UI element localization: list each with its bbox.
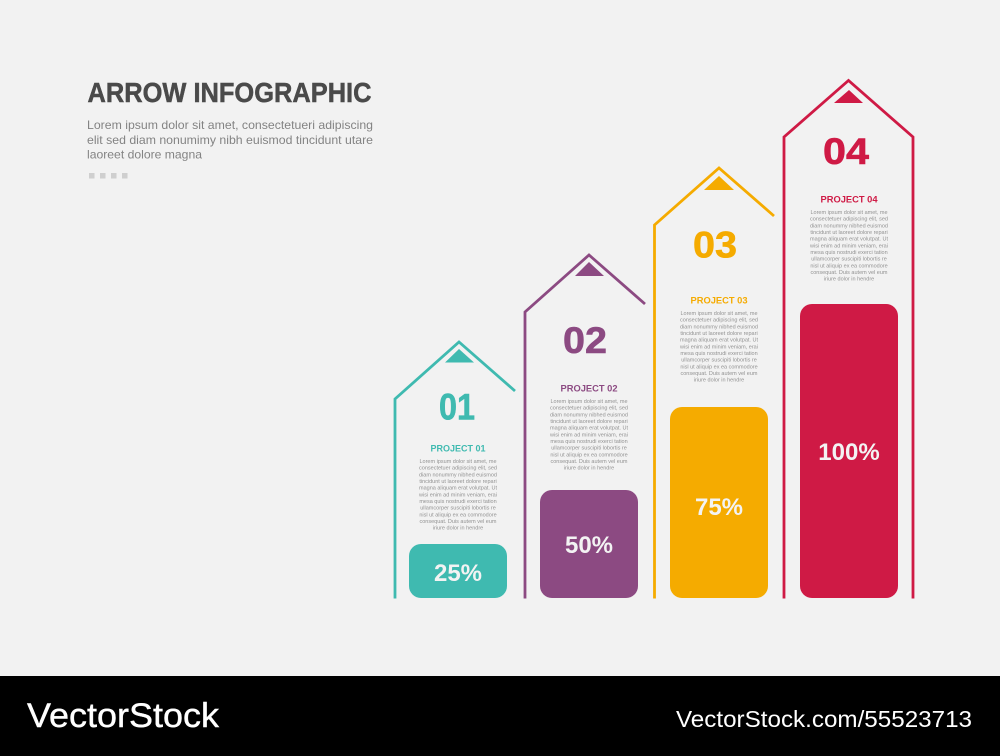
description 01: consectetuer adipiscing elit, sed	[419, 466, 497, 472]
arrow outline 01	[395, 342, 515, 598]
footer url: VectorStock.com/55523713	[676, 706, 972, 732]
description 03	[679, 311, 758, 384]
intro text: laoreet dolore magna	[87, 148, 202, 162]
description 03: nisl ut aliquip ex ea commodore	[680, 364, 758, 370]
description 03: ullamcorper suscipiti lobortis re	[681, 358, 757, 364]
description 01: Lorem ipsum dolor sit amet, me	[419, 459, 497, 465]
description 02: nisl ut aliquip ex ea commodore	[550, 452, 628, 458]
description 04: iriure dolor in hendre	[824, 277, 874, 283]
arrow tip 04	[834, 90, 863, 103]
project label 03: PROJECT 03	[690, 294, 748, 306]
description 04: nisl ut aliquip ex ea commodore	[810, 263, 888, 269]
description 03: magna aliquam erat volutpat. Ut	[680, 338, 758, 344]
bar 75%	[670, 407, 768, 598]
description 02: diam nonummy nibhed euismod	[550, 412, 628, 418]
footer brand: VectorStock	[27, 697, 220, 735]
description 01: wisi enim ad minim veniam, erai	[418, 492, 497, 498]
description 04: mesa quis nostrudi exerci tation	[810, 250, 888, 256]
bar 25%	[409, 544, 507, 598]
arrow column 04	[784, 80, 913, 598]
number 03: 03	[693, 224, 737, 266]
decorative square dots	[89, 173, 128, 178]
description 01: consequat. Duis autem vel eum	[419, 519, 497, 525]
description 03: consectetuer adipiscing elit, sed	[680, 318, 758, 324]
description 02: mesa quis nostrudi exerci tation	[550, 439, 628, 445]
description 01: diam nonummy nibhed euismod	[419, 472, 497, 478]
description 03: wisi enim ad minim veniam, erai	[679, 344, 758, 350]
description 02: ullamcorper suscipiti lobortis re	[551, 446, 627, 452]
arrow column 03	[654, 168, 774, 598]
description 02: consectetuer adipiscing elit, sed	[550, 406, 628, 412]
arrow outline 04	[784, 80, 913, 598]
description 01: nisl ut aliquip ex ea commodore	[419, 512, 497, 518]
project label 04: PROJECT 04	[820, 194, 878, 204]
description 01: tincidunt ut laoreet dolore repari	[419, 479, 497, 485]
number 02: 02	[563, 320, 607, 361]
description 02: consequat. Duis autem vel eum	[550, 459, 628, 465]
arrow outline 03	[654, 168, 774, 598]
description 04: ullamcorper suscipiti lobortis re	[811, 257, 887, 263]
description 02: wisi enim ad minim veniam, erai	[549, 432, 628, 438]
description 04	[809, 210, 888, 283]
description 01: magna aliquam erat volutpat. Ut	[419, 486, 497, 492]
bar 100%	[800, 304, 898, 598]
description 03: consequat. Duis autem vel eum	[680, 371, 758, 377]
description 04: consectetuer adipiscing elit, sed	[810, 217, 888, 223]
value 25%: 25%	[434, 560, 482, 587]
intro text: Lorem ipsum dolor sit amet, consectetueri adipiscing	[87, 118, 373, 132]
description 01: mesa quis nostrudi exerci tation	[419, 499, 497, 505]
arrow tip 02	[575, 262, 604, 276]
description 02: tincidunt ut laoreet dolore repari	[550, 419, 628, 425]
description 04: Lorem ipsum dolor sit amet, me	[810, 210, 888, 216]
description 03: mesa quis nostrudi exerci tation	[680, 351, 758, 357]
arrow column 02	[525, 255, 645, 598]
description 02: iriure dolor in hendre	[564, 466, 614, 472]
description 04: tincidunt ut laoreet dolore repari	[810, 230, 888, 236]
description 03: diam nonummy nibhed euismod	[680, 324, 758, 330]
description 04: wisi enim ad minim veniam, erai	[809, 243, 888, 249]
value 100%: 100%	[818, 439, 880, 466]
description 01	[418, 459, 497, 532]
value 75%: 75%	[695, 494, 743, 521]
arrow tip 03	[704, 176, 734, 190]
description 01: ullamcorper suscipiti lobortis re	[420, 506, 496, 512]
description 04: diam nonummy nibhed euismod	[810, 223, 888, 229]
description 01: iriure dolor in hendre	[433, 526, 483, 532]
description 02: Lorem ipsum dolor sit amet, me	[550, 399, 628, 405]
intro text: elit sed diam nonumimy nibh euismod tincidunt utare	[87, 133, 373, 147]
description 02: magna aliquam erat volutpat. Ut	[550, 426, 628, 432]
project label 01: PROJECT 01	[430, 442, 486, 454]
value 50%: 50%	[565, 532, 613, 559]
title: ARROW INFOGRAPHIC	[88, 77, 372, 108]
description 03: Lorem ipsum dolor sit amet, me	[680, 311, 758, 317]
arrow column 01	[395, 342, 515, 598]
number 04: 04	[823, 131, 869, 172]
number 01: 01	[439, 386, 475, 428]
description 03: iriure dolor in hendre	[694, 378, 744, 384]
footer band	[0, 676, 1000, 756]
description 02	[549, 399, 628, 472]
description 04: consequat. Duis autem vel eum	[810, 270, 888, 276]
description 04: magna aliquam erat volutpat. Ut	[810, 237, 888, 243]
intro text	[87, 118, 373, 162]
arrow tip 01	[445, 349, 474, 362]
description 03: tincidunt ut laoreet dolore repari	[680, 331, 758, 337]
arrow outline 02	[525, 255, 645, 598]
bar 50%	[540, 490, 638, 598]
project label 02: PROJECT 02	[560, 382, 618, 394]
